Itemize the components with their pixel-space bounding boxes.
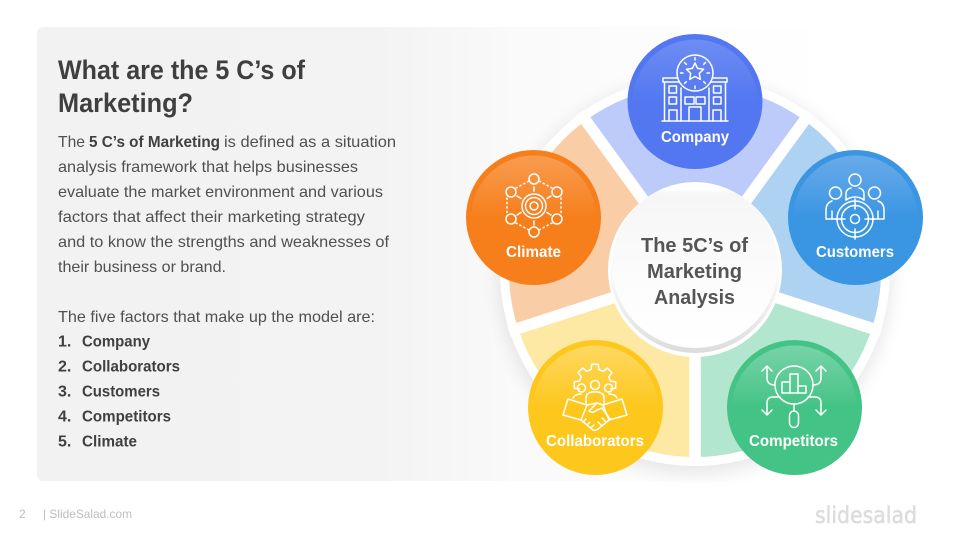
text block: definition: their business or brand. [58,259,226,276]
icon: magnifier with bar chart and arrows [762,366,826,428]
center circle with label: The 5C’s of [641,234,748,257]
circle: company [628,34,762,169]
numbered list of five factors [58,334,180,450]
title [58,55,306,118]
text block: definition: The [58,134,85,151]
circle: climate [466,150,601,285]
center circle with label: Marketing [647,260,742,283]
circle: climate: Climate [506,244,561,261]
text block: definition: analysis framework that helps businesses [58,159,358,176]
text block: definition [58,134,396,276]
chart: 5C pie diagram [498,76,892,473]
segment: collaborators [518,271,695,457]
circle: competitors: Competitors [749,433,838,450]
circle: collaborators: Collaborators [546,433,644,450]
numbered list of five factors: 4. [58,408,71,426]
numbered list of five factors: Competitors [82,408,171,426]
icon: network around a gear [506,174,562,237]
icon: gear, team and handshake [563,364,627,430]
numbered list of five factors: Company [82,334,150,350]
center circle with label: Analysis [654,286,735,309]
segment: climate [509,120,695,328]
text block: definition: and to know the strengths and weaknesses of [58,234,390,251]
title: Marketing? [58,88,193,118]
numbered list of five factors: 2. [58,358,71,376]
icon: people with target [826,174,884,239]
icon: building with star [662,55,728,121]
numbered list of five factors: 1. [58,334,71,350]
center circle with label [608,182,782,357]
segment: company [586,85,804,271]
numbered list of five factors: 3. [58,384,71,400]
text block: list intro: The five factors that make up the model are: [58,309,375,326]
text block: definition: 5 C’s of Marketing [89,134,220,151]
text block: definition: factors that affect their marketing strategy [58,209,365,226]
circle: company: Company [661,129,729,146]
text block: definition: evaluate the market environment and various [58,184,383,201]
numbered list of five factors: Climate [82,434,137,450]
numbered list of five factors: Collaborators [82,358,180,376]
footer: page number: 2 [19,507,26,521]
text block: definition: is defined as a situation [224,134,396,151]
circle: collaborators [528,340,663,475]
footer: website: | SlideSalad.com [43,507,132,521]
panel: text background [37,27,840,481]
title: What are the 5 C’s of [58,55,306,85]
segment: customers [695,120,881,328]
circle: competitors [727,340,862,475]
numbered list of five factors: Customers [82,384,160,400]
numbered list of five factors: 5. [58,434,71,450]
footer: logo: slidesalad [815,503,917,529]
circle: customers [788,150,923,285]
circle: customers: Customers [816,244,894,261]
segment: competitors [695,271,872,457]
